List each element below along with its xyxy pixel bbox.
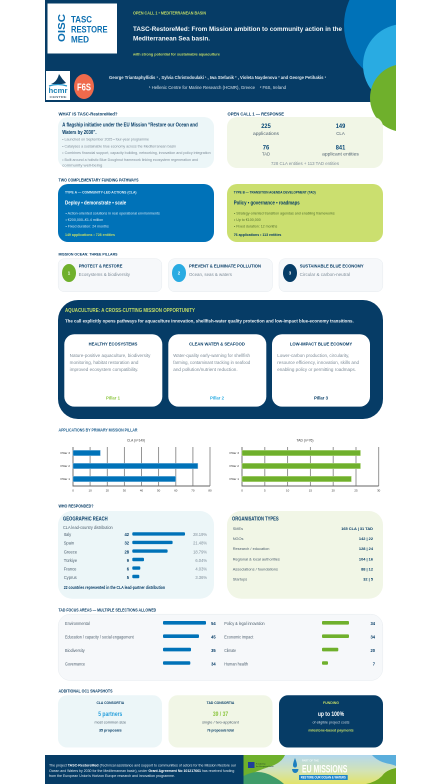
- bar chart: CLA by pillar: 30: [123, 488, 126, 492]
- panel: TAD focus areas: Human health: [224, 661, 249, 666]
- country rows: 21.48%: [193, 541, 207, 546]
- panel: open call response: 149: [336, 123, 346, 130]
- icon: EU flag: [248, 762, 254, 768]
- pillar card 3: Circular & carbon-neutral: [300, 272, 350, 277]
- card: TAD consortia: 76 proposals total: [207, 728, 234, 733]
- card: clean water and seafood: and pollution/nutrient reduction.: [173, 367, 238, 372]
- panel: geographic reach: CLA lead-country distribution: [63, 525, 113, 530]
- card: funding: FUNDING: [323, 700, 339, 705]
- pillar card 1: 1: [68, 271, 71, 276]
- heading: what is: WHAT IS TASC-RestoreMed?: [58, 111, 118, 116]
- card: CLA consortia: 5 partners: [98, 712, 123, 718]
- panel: what is TASC-RestoreMed: [58, 117, 214, 168]
- footer: EU Missions banner: PART OF THE: [302, 758, 319, 762]
- panel: what is TASC-RestoreMed: • Launched on September 2025 • four-year programme: [62, 137, 150, 142]
- bar chart: CLA by pillar: 0: [72, 488, 74, 492]
- panel: type A community-led actions: Deploy • demonstrate • scale: [65, 200, 126, 206]
- card: clean water and seafood: Water-quality early-warning for shellfish: [173, 353, 250, 358]
- title: [133, 26, 342, 43]
- card: low-impact blue economy: Pillar 3: [314, 395, 328, 400]
- country rows: 6: [127, 566, 130, 571]
- country rows: 18.79%: [193, 549, 207, 554]
- panel: organisation types: Regional & local authorities: [233, 556, 280, 561]
- heading: additional snapshots: ADDITIONAL OC1 SNAPSHOTS: [58, 688, 113, 694]
- panel: type B transition agenda development: TYPE B — TRANSITION AGENDA DEVELOPMENT (TAD): [234, 190, 316, 195]
- panel: aquaculture opportunity: AQUACULTURE: A CROSS-CUTTING MISSION OPPORTUNITY: [65, 308, 196, 314]
- bar chart: TAD by pillar: 30: [377, 488, 381, 492]
- pillar card 2: Ocean, seas & waters: [189, 272, 233, 277]
- footer: EU Missions banner: EU MISSIONS: [302, 764, 347, 776]
- bar chart: CLA by pillar: Pillar 2: [61, 464, 70, 468]
- panel: TAD focus areas: Governance: [65, 661, 86, 666]
- panel: aquaculture opportunity: [58, 300, 383, 419]
- bar chart: CLA by pillar: 50: [157, 488, 161, 492]
- panel: geographic reach: [58, 511, 214, 599]
- title: TASC-RestoreMed: From Mission ambition to community action in the: [133, 26, 342, 33]
- card: healthy ecosystems: HEALTHY ECOSYSTEMS: [89, 341, 138, 347]
- eyebrow: OPEN CALL 1 • MEDITERRANEAN BASIN: [133, 10, 206, 16]
- bar chart: TAD by pillar: 5: [264, 488, 266, 492]
- country rows: 42: [124, 532, 130, 537]
- panel: TAD focus areas: 7: [373, 661, 376, 666]
- bar chart: TAD by pillar: 25: [354, 488, 358, 492]
- country rows: France: [64, 566, 77, 571]
- footer: EU Missions banner: Funded by: [256, 764, 265, 766]
- country rows: Türkiye: [64, 558, 78, 563]
- card: funding: up to 100%: [318, 712, 345, 718]
- bar chart: CLA by pillar: 20: [106, 488, 109, 492]
- panel: type B transition agenda development: • Strategy-oriented transition agendas and enabling frameworks: [234, 211, 335, 216]
- card: clean water and seafood: CLEAN WATER & SEAFOOD: [189, 341, 245, 347]
- bar chart: CLA by pillar: CLA (n=149): [127, 438, 145, 442]
- panel: TAD focus areas: 35: [211, 648, 216, 653]
- panel: organisation types: 104 | 16: [359, 556, 374, 561]
- logo: TASC RestoreMed: OISC: [57, 14, 68, 42]
- card: low-impact blue economy: LOW-IMPACT BLUE ECONOMY: [290, 341, 353, 347]
- panel: TAD focus areas: 20: [370, 648, 376, 653]
- panel: open call response: TAD: [262, 152, 271, 157]
- affiliations: ¹ Hellenic Centre for Marine Research (HCMR), Greece ² F6S, Ireland: [149, 85, 287, 90]
- panel: aquaculture opportunity: The call explicitly opens pathways for aquaculture innovation, shellfish-water quality protection and low-impact blue-economy transitions.: [65, 318, 354, 323]
- panel: open call response: [227, 117, 383, 168]
- footer: funding acknowledgement: from the European Union's Horizon Europe research and innovation programme.: [49, 774, 175, 778]
- logo: TASC RestoreMed: [48, 4, 117, 54]
- country rows: Italy: [64, 532, 72, 537]
- panel: what is TASC-RestoreMed: community well-being: [62, 163, 102, 168]
- bar chart: CLA by pillar: 70: [191, 488, 195, 492]
- panel: TAD focus areas: 45: [211, 634, 216, 640]
- card: low-impact blue economy: Lower-carbon production, circularity,: [277, 353, 349, 358]
- pillar card 1: PROTECT & RESTORE: [79, 264, 123, 270]
- logo: F6S: F6S: [77, 83, 91, 94]
- tag: restore our ocean and waters: [299, 775, 348, 780]
- bar chart: CLA by pillar: 80: [208, 488, 212, 492]
- card: TAD consortia: [168, 695, 272, 748]
- panel: organisation types: ORGANISATION TYPES: [232, 517, 279, 523]
- panel: open call response: CLA: [336, 131, 346, 136]
- panel: TAD focus areas: 34: [370, 634, 376, 640]
- card: CLA consortia: [58, 695, 162, 748]
- panel: type B transition agenda development: [227, 184, 383, 242]
- panel: open call response: 841: [336, 144, 346, 151]
- card: healthy ecosystems: improved ecosystem compatibility.: [70, 367, 138, 372]
- panel: organisation types: 128 | 24: [359, 546, 374, 551]
- footer: EU Missions banner: [244, 755, 396, 784]
- country rows: 3.36%: [195, 575, 207, 580]
- panel: what is TASC-RestoreMed: • Combines financial support, capacity building, networking, innovation and policy integration: [62, 150, 211, 155]
- panel: organisation types: Research / education: [233, 546, 269, 551]
- card: TAD consortia: TAD CONSORTIA: [207, 700, 234, 705]
- panel: type B transition agenda development: Policy • governance • roadmaps: [234, 200, 300, 206]
- country rows: 32: [124, 541, 130, 546]
- country rows: Cyprus: [64, 575, 77, 580]
- panel: geographic reach: GEOGRAPHIC REACH: [63, 517, 108, 523]
- tag: restore our ocean and waters: RESTORE OUR OCEAN & WATERS: [301, 776, 346, 780]
- panel: what is TASC-RestoreMed: Waters by 2030”.: [62, 130, 97, 136]
- title: Mediterranean Sea basin.: [133, 36, 210, 43]
- panel: what is TASC-RestoreMed: A flagship initiative under the EU Mission “Restore our Ocean and: [62, 122, 198, 128]
- country rows: 9: [127, 558, 130, 563]
- card: healthy ecosystems: [64, 334, 162, 407]
- card: CLA consortia: most common size: [94, 719, 127, 724]
- panel: organisation types: Startups: [233, 577, 247, 582]
- card: TAD consortia: 39 / 37: [213, 712, 229, 718]
- bar chart: TAD by pillar: 10: [286, 488, 290, 492]
- logo: TASC RestoreMed: TASC: [71, 14, 92, 25]
- bar chart: TAD by pillar: TAD (n=76): [296, 438, 314, 442]
- bar chart: CLA by pillar: [61, 438, 212, 492]
- bar chart: CLA by pillar: 40: [140, 488, 143, 492]
- logo: TASC RestoreMed: MED: [71, 34, 89, 45]
- pillar card 1: Ecosystems & biodiversity: [79, 272, 131, 277]
- footer: funding acknowledgement: Ocean and Waters by 2030 for the Mediterranean basin), under Grant Agreement No 101217661 has received funding: [49, 769, 234, 773]
- country rows: 6.04%: [195, 558, 207, 563]
- decorative circles: [344, 0, 396, 131]
- panel: open call response: applicant entities: [322, 152, 360, 157]
- card: clean water and seafood: [168, 334, 266, 407]
- panel: TAD focus areas: 34: [370, 621, 376, 626]
- panel: what is TASC-RestoreMed: • Built around a holistic Blue Doughnut framework linking ecosystem regeneration and: [62, 157, 198, 162]
- panel: type A community-led actions: [58, 184, 214, 242]
- pillar card 2: PREVENT & ELIMINATE POLLUTION: [189, 264, 261, 270]
- card: low-impact blue economy: enabling policy or permitting roadmaps.: [277, 367, 356, 372]
- country rows: [64, 532, 207, 580]
- panel: open call response: 728 CLA entities + 113 TAD entities: [271, 161, 340, 166]
- panel: open call response: 76: [263, 144, 270, 151]
- bar chart: TAD by pillar: Pillar 3: [230, 451, 239, 455]
- panel: type A community-led actions: TYPE A — COMMUNITY-LED ACTIONS (CLA): [65, 190, 137, 195]
- panel: type A community-led actions: • Action-oriented solutions in real operational environments: [66, 211, 160, 216]
- pillar card 3: SUSTAINABLE BLUE ECONOMY: [300, 264, 364, 270]
- bar chart: TAD by pillar: [230, 438, 381, 492]
- pillar card 2: [168, 259, 272, 292]
- logo: F6S: [74, 74, 94, 99]
- panel: open call response: 225: [261, 123, 271, 130]
- tagline: with strong potential for sustainable aquaculture: [132, 52, 221, 57]
- panel: organisation types: 142 | 22: [359, 536, 374, 541]
- country rows: Spain: [64, 541, 75, 546]
- footer: EU Missions banner: the European Union: [256, 765, 274, 768]
- heading: TAD focus areas: TAD FOCUS AREAS — MULTIPLE SELECTIONS ALLOWED: [58, 608, 156, 612]
- card: CLA consortia: CLA CONSORTIA: [96, 700, 124, 705]
- panel: TAD focus areas: Education / capacity / social engagement: [65, 634, 134, 640]
- panel: organisation types: [227, 511, 383, 599]
- card: low-impact blue economy: resource efficiency, innovation, skills and: [277, 360, 359, 365]
- pillar card 3: [279, 259, 383, 292]
- bar chart: CLA by pillar: 10: [88, 488, 92, 492]
- heading: who responded: WHO RESPONDED?: [58, 504, 94, 508]
- card: low-impact blue economy: [272, 334, 370, 407]
- logo: hcmr: CENTRE: [50, 96, 67, 99]
- bar chart: TAD by pillar: 0: [241, 488, 243, 492]
- card: funding: milestone-based payments: [308, 728, 354, 733]
- panel: TAD focus areas: [58, 614, 383, 680]
- panel: open call response: applications: [253, 131, 280, 136]
- panel: geographic reach: 22 countries represented in the CLA lead-partner distribution: [64, 585, 165, 590]
- panel: organisation types: 32 | 5: [363, 577, 374, 582]
- heading: applications by pillar: APPLICATIONS BY PRIMARY MISSION PILLAR: [58, 428, 138, 433]
- panel: type B transition agenda development: 76 applications • 113 entities: [234, 232, 282, 237]
- heading: funding pathways: TWO COMPLEMENTARY FUNDING PATHWAYS: [58, 178, 139, 183]
- bar chart: CLA by pillar: Pillar 1: [61, 477, 70, 481]
- pillar card 3: 3: [289, 271, 292, 276]
- country rows: 28.19%: [193, 532, 207, 537]
- card: clean water and seafood: Pillar 2: [210, 395, 224, 400]
- panel: type A community-led actions: • €200,000–€1.4 million: [66, 217, 103, 222]
- panel: organisation types: SMEs: [233, 526, 243, 531]
- panel: what is TASC-RestoreMed: • Catalyses a sustainable blue economy across the Mediterranean basin: [62, 143, 176, 148]
- country rows: 5: [127, 575, 130, 580]
- bar chart: TAD by pillar: 20: [332, 488, 335, 492]
- bar chart: CLA by pillar: Pillar 3: [61, 451, 70, 455]
- heading: three pillars: MISSION OCEAN: THREE PILLARS: [58, 251, 118, 256]
- logo: hcmr: hcmr: [48, 88, 68, 95]
- panel: organisation types: 165 CLA | 31 TAD: [341, 526, 373, 531]
- bar chart: CLA by pillar: 60: [174, 488, 178, 492]
- card: healthy ecosystems: monitoring, habitat restoration and: [70, 360, 139, 365]
- heading: response: OPEN CALL 1 — RESPONSE: [228, 111, 284, 116]
- bar chart: TAD by pillar: Pillar 1: [230, 477, 239, 481]
- card: CLA consortia: 35 proposals: [99, 728, 122, 733]
- bar chart: TAD by pillar: 15: [309, 488, 312, 492]
- card: healthy ecosystems: Pillar 1: [106, 395, 120, 400]
- panel: organisation types: Associations / foundations: [233, 567, 278, 572]
- card: healthy ecosystems: Nature-positive aquaculture, biodiversity: [70, 353, 151, 358]
- header banner: [45, 0, 396, 131]
- bar chart: TAD by pillar: Pillar 2: [230, 464, 239, 468]
- footer: funding acknowledgement: The project TASC-RestoreMed (Technical assistance and support to communities of actors for the Mission Restore our: [49, 763, 237, 767]
- pillar card 1: [58, 259, 162, 292]
- panel: organisation types: NGOs: [233, 536, 244, 541]
- pillar card 2: 2: [178, 271, 181, 276]
- panel: TAD focus areas: Biodiversity: [65, 648, 86, 653]
- panel: type A community-led actions: • Fixed duration: 24 months: [66, 224, 109, 229]
- card: funding: of eligible project costs: [312, 719, 350, 724]
- footer: funding acknowledgement: [45, 755, 244, 784]
- authors: George Triantaphyllidis ¹ , Sylvia Christodoulaki ¹ , Iwa Stefanik ² , Violeta Naydenova ² and George Petihakis ¹: [109, 75, 327, 80]
- panel: type B transition agenda development: • Up to €100,000: [234, 217, 261, 222]
- card: funding: [279, 695, 383, 748]
- panel: TAD focus areas: 34: [211, 661, 216, 666]
- panel: organisation types: 88 | 12: [361, 567, 374, 572]
- panel: type B transition agenda development: • Fixed duration: 12 months: [234, 224, 277, 229]
- panel: TAD focus areas: Policy & legal innovation: [224, 621, 265, 626]
- icon: water drop: [292, 758, 298, 773]
- logo: TASC RestoreMed: RESTORE: [71, 25, 108, 36]
- panel: TAD focus areas: 54: [211, 621, 216, 626]
- panel: type A community-led actions: 149 applications • 728 entities: [65, 232, 116, 237]
- logo: hcmr: [46, 71, 70, 100]
- card: TAD consortia: single / two-applicant: [202, 719, 240, 724]
- country rows: Greece: [64, 549, 78, 554]
- panel: TAD focus areas: Environmental: [65, 621, 90, 626]
- card: clean water and seafood: farming, contaminant tracking in seafood: [173, 360, 251, 365]
- country rows: 28: [124, 549, 130, 554]
- panel: TAD focus areas: Economic impact: [224, 634, 254, 640]
- panel: TAD focus areas: Climate: [224, 648, 237, 653]
- country rows: 4.03%: [195, 566, 207, 571]
